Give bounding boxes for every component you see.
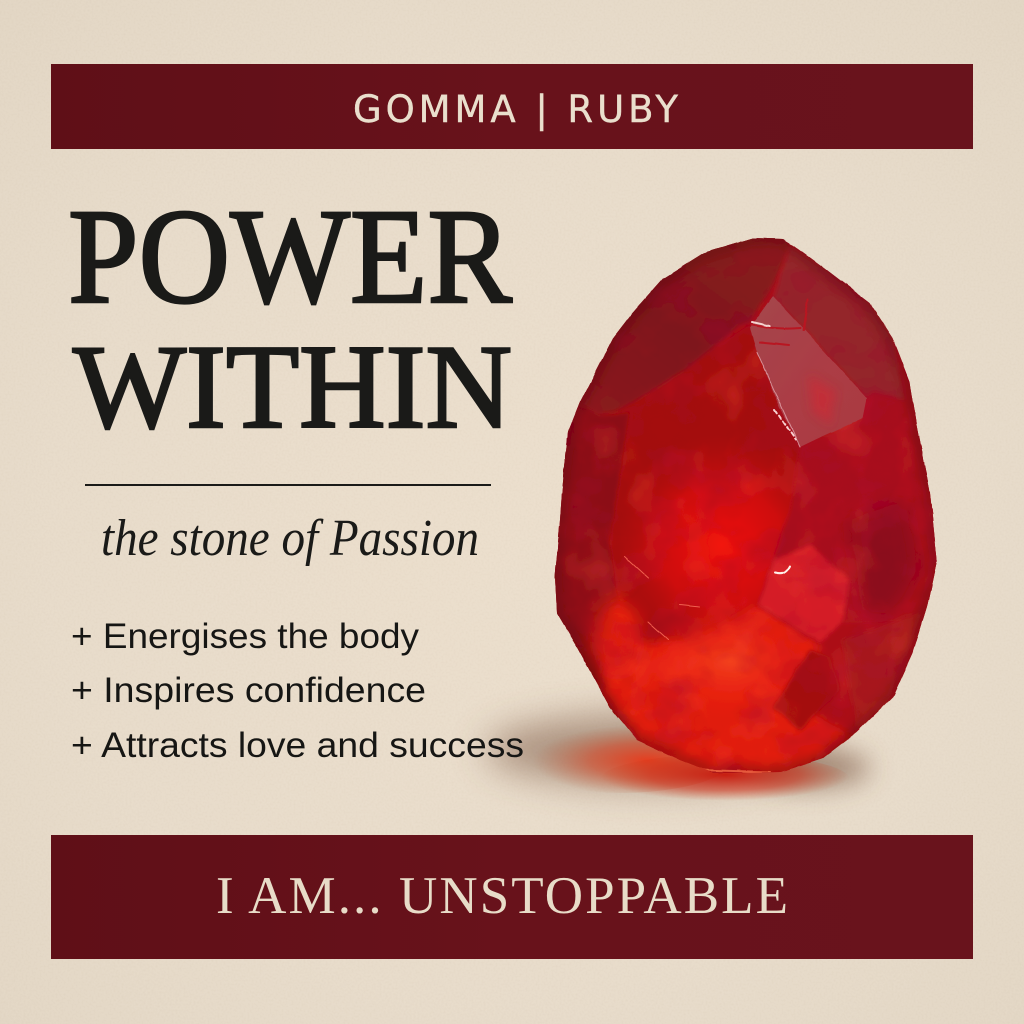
benefit three: + Attracts love and success (71, 726, 524, 765)
dark texture (554, 238, 937, 774)
cracks and highlights (625, 300, 808, 772)
affirmation: I AM... UNSTOPPABLE (216, 867, 788, 925)
pale reflective facet (750, 296, 867, 447)
stone shadow and red glow (485, 714, 870, 806)
pink lit facet (758, 545, 850, 643)
subtitle: the stone of Passion (101, 510, 479, 567)
stone base colour (554, 238, 937, 772)
light texture (555, 245, 937, 774)
right side body (758, 360, 950, 643)
inner glow (610, 436, 796, 642)
edge shading (555, 238, 937, 773)
ruby gemstone (554, 238, 937, 774)
right dark patch (850, 500, 918, 615)
facet red streak (808, 378, 836, 422)
bottom banner (51, 835, 973, 959)
banner text: GOMMA | RUBY (353, 88, 678, 131)
title line two: WITHIN (73, 320, 512, 453)
top banner (51, 64, 973, 149)
title divider (85, 484, 491, 486)
benefits list (71, 617, 524, 765)
central deep facet (600, 325, 800, 643)
left lower glow (592, 600, 644, 680)
lower right facet (842, 610, 925, 732)
title line one: POWER (68, 182, 512, 332)
top dark facet (578, 238, 791, 416)
benefit two: + Inspires confidence (71, 671, 426, 710)
left side facet (554, 403, 634, 724)
upper right facet (773, 245, 905, 400)
title (68, 182, 512, 453)
lower dark wedge (773, 650, 840, 730)
benefit one: + Energises the body (71, 617, 420, 656)
lower bright area (600, 593, 850, 790)
